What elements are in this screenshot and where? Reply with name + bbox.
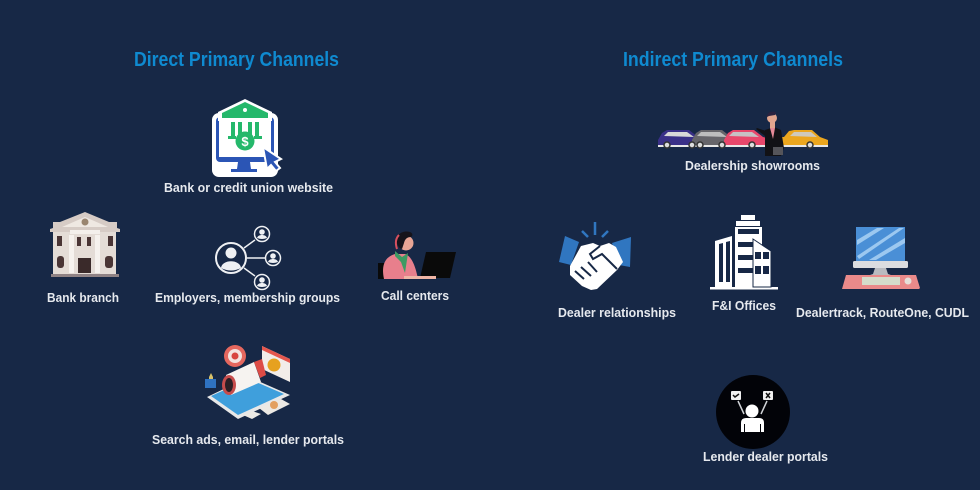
icon: office building	[710, 215, 778, 290]
item: dealer relationships	[558, 222, 676, 320]
label: Search ads, email, lender portals	[152, 432, 344, 447]
label: Lender dealer portals	[703, 449, 828, 464]
icon: handshake	[559, 222, 631, 290]
label: Employers, membership groups	[155, 290, 340, 305]
item: bank branch	[47, 212, 120, 305]
item: lender dealer portals	[703, 375, 828, 464]
icon: cars and salesman	[658, 112, 828, 156]
icon: digital marketing megaphone	[205, 345, 290, 419]
label: F&I Offices	[712, 298, 776, 313]
item: bank or credit union website	[164, 99, 333, 195]
item: call centers	[378, 232, 456, 303]
heading: direct: Direct Primary Channels	[134, 49, 339, 71]
icon: call center agent	[378, 232, 456, 279]
icon: bank website monitor	[212, 99, 281, 177]
item: F&I offices	[710, 215, 778, 313]
heading: indirect: Indirect Primary Channels	[623, 49, 843, 71]
label: Bank or credit union website	[164, 180, 333, 195]
icon: bank website monitor: $	[241, 134, 249, 149]
label: Call centers	[381, 288, 449, 303]
label: Dealertrack, RouteOne, CUDL	[796, 305, 969, 320]
label: Dealership showrooms	[685, 158, 820, 173]
item: dealership showrooms	[658, 112, 828, 173]
item: employers, membership groups	[155, 226, 340, 305]
item: search ads, email, lender portals	[152, 345, 344, 447]
label: Bank branch	[47, 290, 119, 305]
icon: people network	[216, 226, 280, 290]
icon: desktop computer	[842, 227, 920, 289]
panel: direct primary channels	[47, 49, 456, 447]
icon: bank building	[50, 212, 120, 277]
icon: person choosing options	[716, 375, 790, 449]
label: Dealer relationships	[558, 305, 676, 320]
panel: indirect primary channels	[558, 49, 969, 464]
item: dealertrack, routeone, cudl	[796, 227, 969, 320]
